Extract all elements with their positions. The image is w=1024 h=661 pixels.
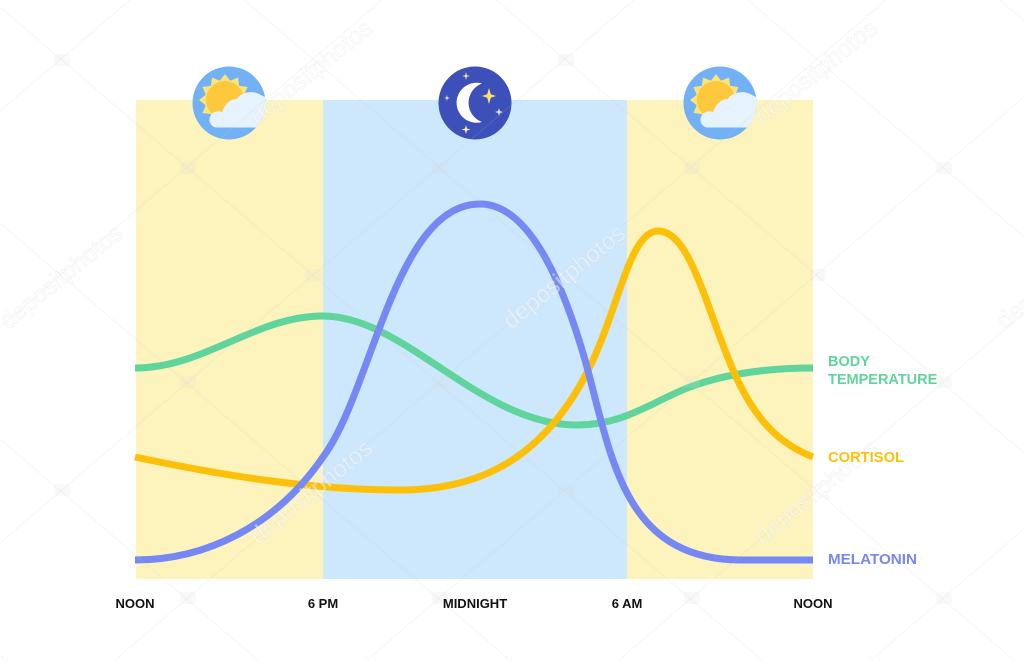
watermark text: depositphotos xyxy=(245,435,378,550)
line: cortisol xyxy=(135,231,813,490)
watermark text: depositphotos xyxy=(750,435,883,550)
axis label: 6 am: 6 AM xyxy=(612,596,642,611)
icon: moon and stars xyxy=(438,66,512,140)
panel: afternoon daytime band xyxy=(136,100,323,579)
line: melatonin xyxy=(135,204,813,560)
label: cortisol: CORTISOL xyxy=(828,450,904,466)
label: body temperature: TEMPERATURE xyxy=(828,372,938,388)
panel: night band xyxy=(323,100,627,579)
axis label: midnight: MIDNIGHT xyxy=(443,596,507,611)
label: melatonin: MELATONIN xyxy=(828,552,917,568)
axis label: noon end: NOON xyxy=(794,596,832,611)
panel: morning daytime band xyxy=(627,100,813,579)
axis label: noon start: NOON xyxy=(116,596,154,611)
icon: sun and cloud right xyxy=(684,66,760,140)
watermark text: depositphotos xyxy=(498,220,631,335)
watermark cameras xyxy=(54,54,952,604)
line: body temperature xyxy=(135,316,813,425)
axis label: 6 pm: 6 PM xyxy=(308,596,338,611)
label: body temperature: BODY xyxy=(828,354,870,370)
watermark text: depositphotos xyxy=(245,15,378,130)
icon: sun and cloud left xyxy=(192,66,269,140)
watermark text: depositphotos xyxy=(750,15,883,130)
